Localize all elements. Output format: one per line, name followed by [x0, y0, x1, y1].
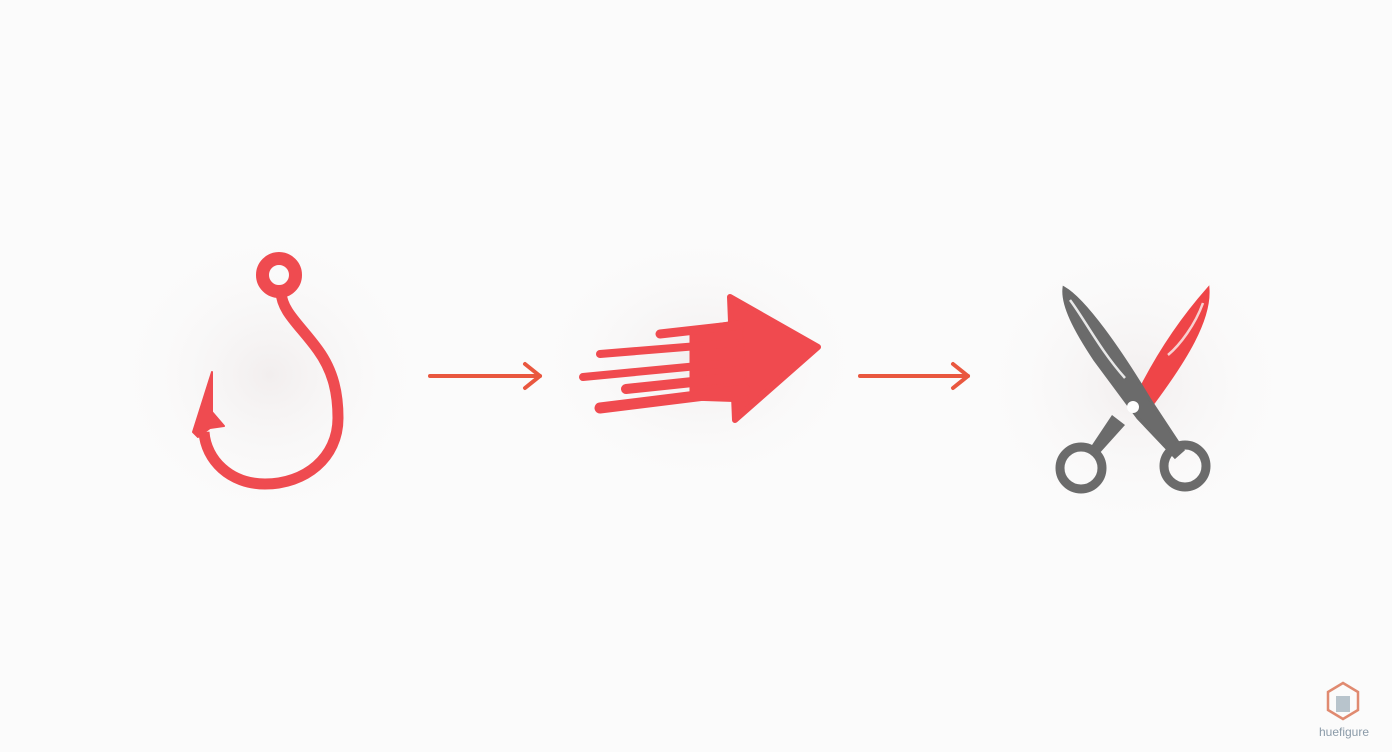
logo: huefigure [1319, 683, 1369, 739]
arrow: hook to speed [430, 364, 540, 388]
arrow: speed to scissors [860, 364, 968, 388]
icon: scissors [1060, 288, 1208, 489]
icon: fishing hook [193, 258, 338, 484]
logo: huefigure: huefigure [1319, 725, 1369, 739]
icon: speed arrow [583, 297, 818, 420]
